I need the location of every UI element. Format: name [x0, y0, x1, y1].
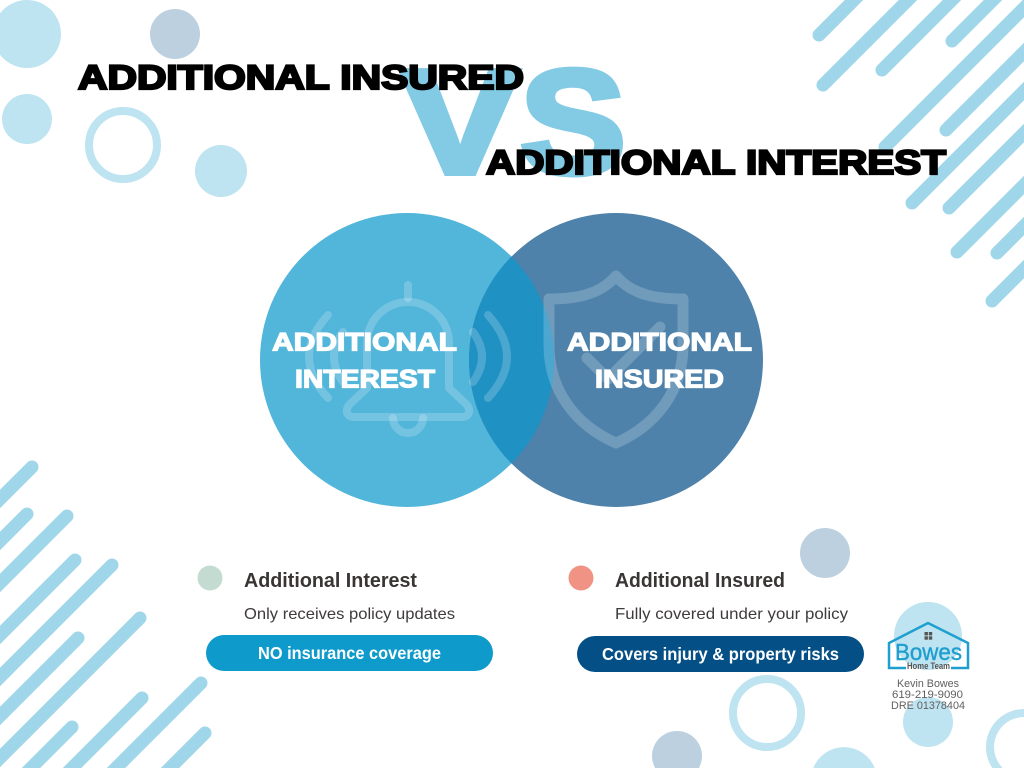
big VS lettering: V: [401, 40, 519, 205]
logo tagline: Home Team: [907, 661, 950, 672]
venn label: additional insured: INSURED: [595, 366, 724, 394]
contact details: DRE 01378404: [891, 700, 965, 712]
venn label: additional interest: INTEREST: [295, 366, 435, 394]
venn label: additional insured: [567, 328, 752, 394]
venn diagram: [260, 213, 763, 507]
contact details: 619-219-9090: [892, 689, 963, 701]
legend: additional insured: [568, 566, 864, 672]
pill: no insurance coverage: NO insurance coverage: [258, 643, 441, 663]
pill: no insurance coverage: [206, 635, 493, 671]
venn overlap: [469, 257, 554, 463]
big VS lettering: [401, 40, 626, 205]
big VS lettering: S: [520, 40, 626, 205]
legend heading: additional interest: Additional Interest: [244, 570, 417, 592]
icon: house window: [924, 632, 932, 640]
legend description: insured: Fully covered under your policy: [615, 606, 848, 623]
legend dot: coral: [568, 566, 594, 590]
decorative circles: bottom right: [652, 528, 1024, 768]
icon: shield with check: [549, 276, 683, 443]
venn label: additional interest: ADDITIONAL: [272, 328, 457, 356]
icon: house outline: [889, 623, 968, 668]
legend description: interest: Only receives policy updates: [244, 606, 455, 623]
decorative stripes: bottom left: [0, 460, 212, 768]
legend: additional interest: [198, 566, 493, 671]
logo wordmark: Bowes: [895, 639, 962, 665]
decorative circles: top left: [0, 0, 247, 197]
pill: covers injury and property risks: Covers injury & property risks: [602, 644, 839, 664]
title: additional interest: ADDITIONAL INTEREST: [486, 144, 946, 182]
venn circle: additional interest: [260, 213, 554, 507]
legend heading: additional insured: Additional Insured: [615, 570, 785, 592]
pill: covers injury and property risks: [577, 636, 864, 672]
contact details: Kevin Bowes: [897, 678, 959, 690]
venn label: additional interest: [272, 328, 457, 394]
logo: Bowes Home Team: [889, 623, 968, 672]
decorative stripes: top right: [813, 0, 1024, 307]
contact details: [891, 678, 965, 712]
title: additional insured: ADDITIONAL INSURED: [78, 59, 524, 97]
venn circle: additional insured: [469, 213, 763, 507]
venn label: additional insured: ADDITIONAL: [567, 328, 752, 356]
icon: bell: [309, 285, 507, 433]
legend dot: green: [198, 566, 222, 590]
